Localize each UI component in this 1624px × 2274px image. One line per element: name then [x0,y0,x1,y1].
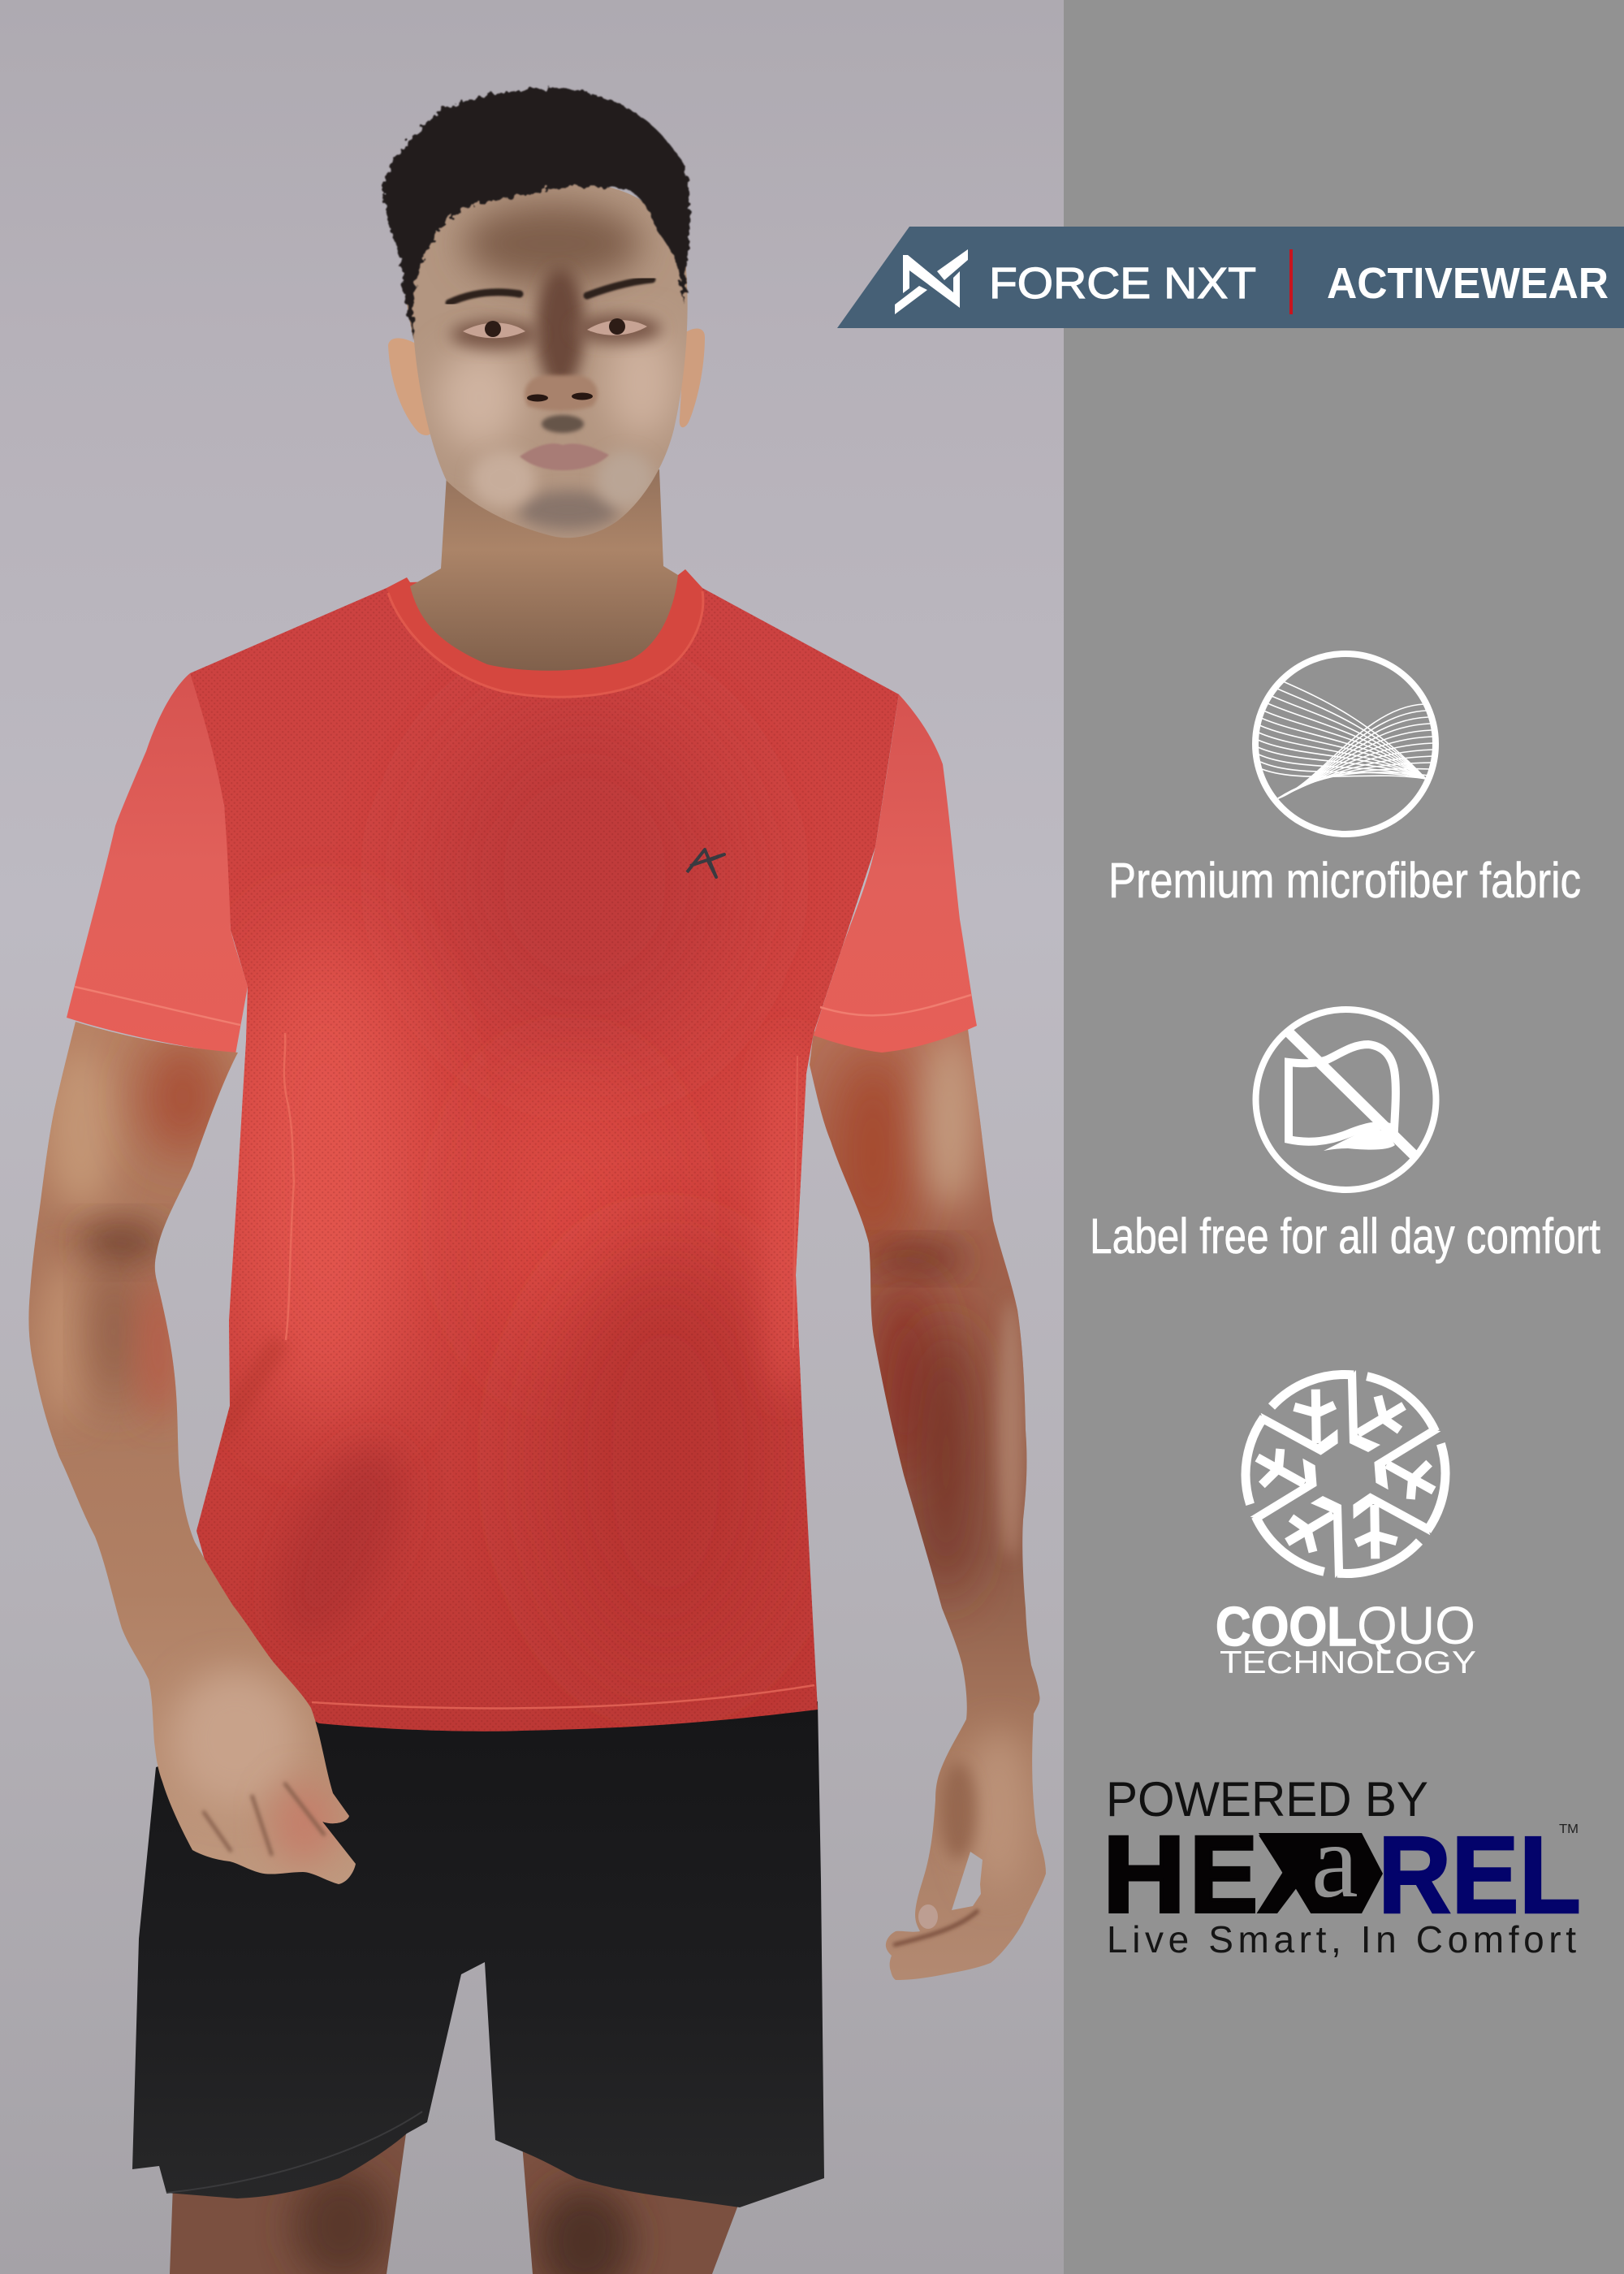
photo: male model [16,88,1056,2274]
HEX letters: E [1190,1814,1258,1935]
left ear [388,338,433,435]
right grey panel [1064,0,1624,2274]
icon: woven fabric waves [1255,654,1436,834]
CoolQuo wordmark: COOL [1216,1596,1357,1658]
hexagon badge [1257,1833,1383,1913]
red divider [1289,249,1293,314]
right ear [680,329,705,427]
tagline: Live Smart, In Comfort [1107,1918,1576,1961]
trademark: TM [1559,1822,1579,1836]
eyebrows [449,279,652,303]
legs [170,2134,737,2274]
head [383,88,705,544]
shirt right sleeve [814,694,977,1053]
nose [525,375,598,411]
face [404,184,688,538]
powered by: POWERED BY [1106,1772,1428,1827]
left arm and hand [16,1015,365,1900]
gap between thumb and fingers [952,1852,983,1910]
black shorts [132,1701,824,2207]
icon: crossed-out label [1255,1009,1436,1190]
HEX letters: X [1259,1814,1328,1935]
feature: CoolQuo technology [1216,1358,1476,1680]
brand name: FORCE NXT [989,259,1256,308]
technology caption: TECHNOLOGY [1220,1645,1476,1680]
REL letters: REL [1378,1814,1581,1936]
neck [410,469,678,671]
right arm and hand [810,1030,1046,1980]
brand banner [837,227,1624,328]
red t-shirt [67,560,977,1746]
icon: snowflake wheel [1219,1358,1472,1590]
shirt seams and cuffs [75,987,971,1708]
shirt body [190,588,899,1731]
category name: ACTIVEWEAR [1327,259,1609,308]
feature: label free [1090,1009,1600,1264]
lowercase a: a [1311,1803,1358,1920]
shirt collar [387,569,704,697]
chest logo [687,850,724,877]
HEX letters: H [1103,1814,1186,1935]
icon: Force NXT logo mark [895,249,968,314]
eyes [463,318,647,338]
feature: premium microfiber fabric [1108,654,1581,908]
hair [383,88,689,341]
lips [520,443,609,470]
HEX letters [1103,1814,1328,1935]
shirt left sleeve [67,673,248,1054]
Quo wordmark: QUO [1357,1595,1475,1655]
powered by Hexarel logo [1103,1772,1581,1961]
photo background [0,0,1065,2274]
